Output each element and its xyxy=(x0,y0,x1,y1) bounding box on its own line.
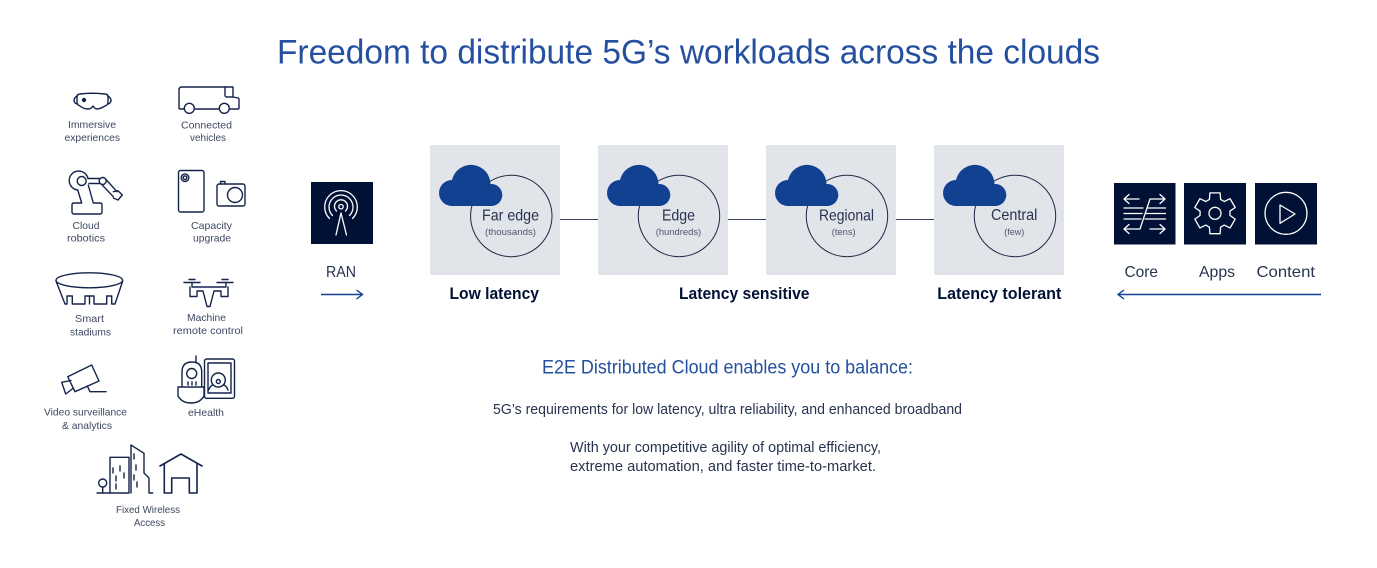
connector lines xyxy=(560,218,934,220)
use case: cloud robotics xyxy=(67,171,122,244)
panel: use cases xyxy=(44,87,245,529)
use case: connected vehicles xyxy=(179,87,239,144)
use case: fixed wireless access xyxy=(97,445,202,529)
arrow: left xyxy=(1118,290,1321,299)
tile background xyxy=(430,145,560,275)
label: immersive experiences: experiences xyxy=(64,132,120,144)
label: fixed wireless access: Fixed Wireless xyxy=(116,504,180,516)
panel: regional xyxy=(766,145,896,275)
count: tens: (tens) xyxy=(832,227,856,238)
count: thousands: (thousands) xyxy=(485,227,536,238)
icon: antenna tile xyxy=(311,182,373,244)
icon: robot arm xyxy=(69,171,122,214)
icon: house xyxy=(160,454,202,493)
panel: far edge xyxy=(430,145,560,275)
arrow: right xyxy=(321,290,362,299)
label: cloud robotics: Cloud xyxy=(72,220,100,232)
circle xyxy=(471,175,552,257)
count: few: (few) xyxy=(1004,227,1024,238)
label: video surveillance and analytics: Video surveillance xyxy=(44,407,127,419)
icon: content tile xyxy=(1255,183,1317,244)
text block: competitive agility: extreme automation, and faster time-to-market. xyxy=(570,459,876,475)
use case: capacity upgrade xyxy=(178,170,245,244)
use case: immersive experiences xyxy=(64,93,120,144)
text block: competitive agility xyxy=(570,440,881,475)
label: video surveillance and analytics xyxy=(44,407,127,432)
icon: core tile xyxy=(1114,183,1176,244)
label: central: Central xyxy=(991,207,1037,224)
label: edge: Edge xyxy=(662,208,695,224)
label: latency sensitive: Latency sensitive xyxy=(679,285,810,303)
label: low latency: Low latency xyxy=(450,285,540,303)
icon: phone and camera xyxy=(178,170,245,212)
label: capacity upgrade: upgrade xyxy=(193,232,231,244)
circle xyxy=(974,175,1056,257)
label: capacity upgrade xyxy=(191,220,233,244)
label: eHealth: eHealth xyxy=(188,407,224,419)
icon: VR goggles xyxy=(74,93,111,109)
label: smart stadiums: Smart xyxy=(75,313,104,325)
icon: baby monitor and tablet xyxy=(178,356,234,403)
label: machine remote control: Machine xyxy=(187,312,226,324)
label: RAN: RAN xyxy=(326,264,356,281)
label: smart stadiums xyxy=(70,313,111,338)
label: connected vehicles: Connected xyxy=(181,120,232,132)
label: machine remote control xyxy=(173,312,243,337)
label: machine remote control: remote control xyxy=(173,325,243,337)
panel: central xyxy=(934,145,1064,275)
label: cloud robotics: robotics xyxy=(67,232,105,244)
latency labels xyxy=(450,285,1062,303)
label: content: Content xyxy=(1256,264,1316,281)
icon: drone xyxy=(184,280,233,306)
label: capacity upgrade: Capacity xyxy=(191,220,233,232)
icon: stadium xyxy=(56,273,123,304)
label: immersive experiences xyxy=(64,119,120,144)
text block: competitive agility: With your competitive agility of optimal efficiency, xyxy=(570,440,881,456)
label: cloud robotics xyxy=(67,220,105,244)
use case: smart stadiums xyxy=(56,273,123,338)
icon: city buildings xyxy=(97,445,153,493)
tile background xyxy=(598,145,728,275)
count: hundreds: (hundreds) xyxy=(656,227,701,238)
subheading: E2E Distributed Cloud enables you to balance: xyxy=(542,356,913,378)
icon: cloud xyxy=(775,165,838,206)
label: latency tolerant: Latency tolerant xyxy=(937,285,1062,303)
text block: requirements: 5G’s requirements for low latency, ultra reliability, and enhanced broadband xyxy=(493,402,962,418)
label: regional: Regional xyxy=(819,208,874,224)
icon: cloud xyxy=(439,165,502,206)
title: Freedom to distribute 5G’s workloads across the clouds xyxy=(277,34,1100,72)
label: connected vehicles xyxy=(181,120,232,144)
icon: cloud xyxy=(607,165,670,206)
label: fixed wireless access: Access xyxy=(134,517,165,529)
label: immersive experiences: Immersive xyxy=(68,119,116,131)
label: core: Core xyxy=(1124,264,1158,281)
label: fixed wireless access xyxy=(116,504,180,529)
label: far edge: Far edge xyxy=(482,208,539,224)
icon: cloud xyxy=(943,165,1006,206)
use case: eHealth xyxy=(178,356,234,419)
icon: security camera xyxy=(62,365,106,394)
panel: RAN xyxy=(311,182,373,299)
panel: core, apps, content xyxy=(1114,183,1321,299)
label: apps: Apps xyxy=(1199,264,1235,281)
circle xyxy=(806,175,888,257)
tile background xyxy=(766,145,896,275)
tile background xyxy=(934,145,1064,275)
use case: video surveillance xyxy=(44,365,127,432)
use case: machine remote control xyxy=(173,280,243,337)
icon: apps tile xyxy=(1184,183,1246,244)
icon: van xyxy=(179,87,239,113)
label: smart stadiums: stadiums xyxy=(70,326,111,338)
label: video surveillance and analytics: & analytics xyxy=(62,420,112,432)
circle xyxy=(638,175,720,257)
label: connected vehicles: vehicles xyxy=(190,132,226,144)
panel: edge xyxy=(598,145,728,275)
